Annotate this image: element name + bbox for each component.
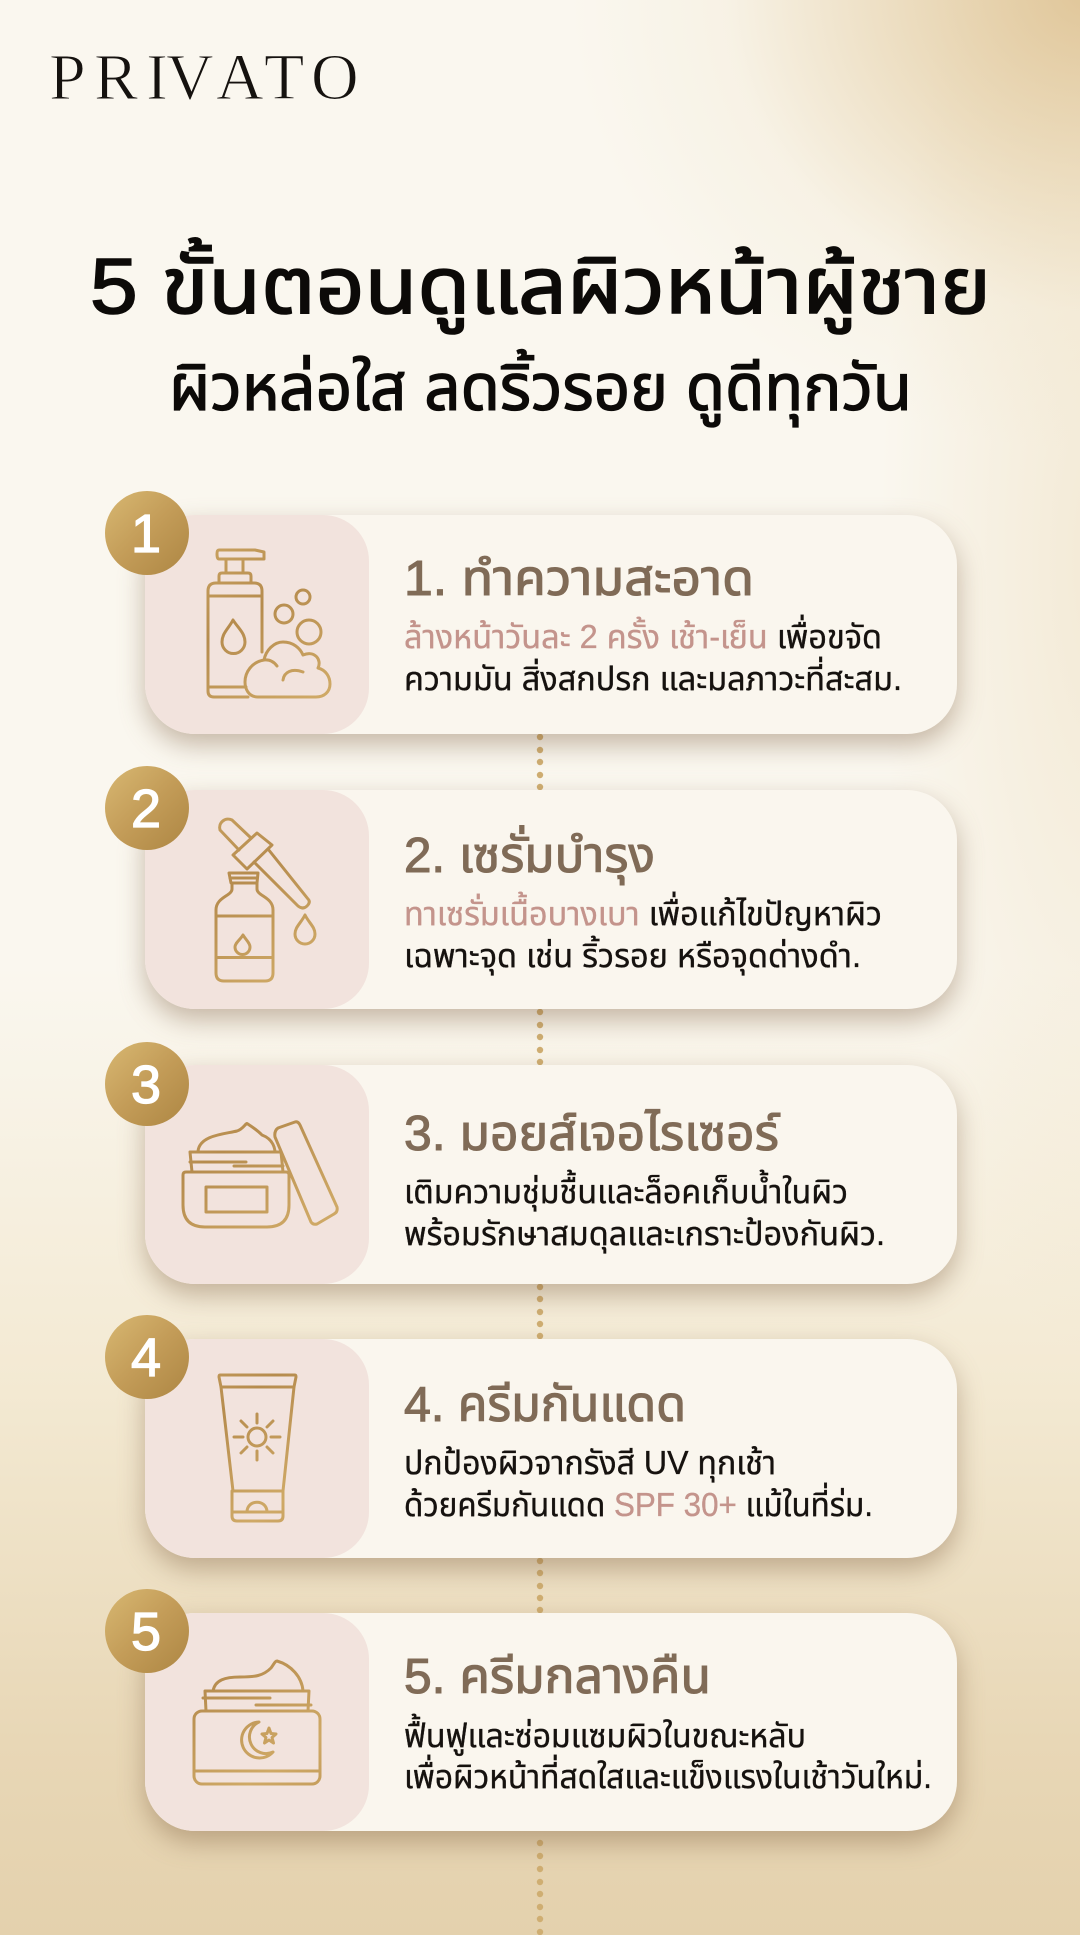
icon: serum dropper bottle [216, 819, 315, 981]
step description [404, 1169, 885, 1254]
step description: ด้วยครีมกันแดด SPF 30+ แม้ในที่ร่ม. [404, 1482, 873, 1523]
panel: step 3 [105, 1042, 957, 1284]
step description [404, 1713, 932, 1795]
icon panel [145, 1065, 369, 1284]
card background [145, 1613, 957, 1831]
number badge [105, 1042, 189, 1126]
number badge [105, 1315, 189, 1399]
panel: step 2 [105, 766, 957, 1009]
step description [404, 1444, 873, 1523]
number badge [105, 766, 189, 850]
step description: เพื่อผิวหน้าที่สดใสและแข็งแรงในเช้าวันใหม่. [404, 1754, 932, 1795]
step title: 1. ทำความสะอาด [404, 552, 754, 606]
heading line 2: ผิวหล่อใส ลดริ้วรอย ดูดีทุกวัน [169, 349, 912, 427]
number badge: 2 [131, 779, 161, 839]
number badge: 5 [131, 1602, 161, 1662]
step description: เฉพาะจุด เช่น ริ้วรอย หรือจุดด่างดำ. [404, 935, 861, 976]
icon panel [145, 1339, 369, 1558]
step title: 4. ครีมกันแดด [404, 1378, 686, 1432]
logo: PRIVATO [49, 41, 359, 114]
heading line 1: 5 ขั้นตอนดูแลผิวหน้าผู้ชาย [90, 238, 991, 334]
icon panel [145, 515, 369, 734]
panel: step 4 [105, 1315, 957, 1558]
icon: pump bottle and foam [208, 550, 330, 697]
panel: step 5 [105, 1589, 957, 1831]
step title: 3. มอยส์เจอไรเซอร์ [404, 1107, 780, 1161]
step description: ปกป้องผิวจากรังสี UV ทุกเช้า [404, 1444, 776, 1483]
step description [404, 891, 882, 976]
step description: ทาเซรั่มเนื้อบางเบา เพื่อแก้ไขปัญหาผิว [404, 891, 882, 932]
icon panel [145, 1613, 369, 1831]
step description: ล้างหน้าวันละ 2 ครั้ง เช้า-เย็น เพื่อขจัด [404, 614, 882, 655]
dotted connector 4 [537, 1558, 543, 1613]
card background [145, 790, 957, 1009]
number badge: 4 [131, 1328, 161, 1388]
title [90, 238, 991, 427]
dotted connector 3 [537, 1284, 543, 1339]
number badge [105, 491, 189, 575]
card background [145, 1065, 957, 1284]
step description: ความมัน สิ่งสกปรก และมลภาวะที่สะสม. [404, 656, 902, 697]
panel: step 1 [105, 491, 957, 734]
step description: พร้อมรักษาสมดุลและเกราะป้องกันผิว. [404, 1215, 885, 1254]
dotted connector 1 [537, 734, 543, 790]
step title: 5. ครีมกลางคืน [404, 1650, 711, 1704]
number badge: 1 [131, 504, 161, 564]
dotted connector 5 [537, 1840, 543, 1935]
number badge [105, 1589, 189, 1673]
icon panel [145, 790, 369, 1009]
step description [404, 614, 902, 697]
step description: เติมความชุ่มชื้นและล็อคเก็บน้ำในผิว [404, 1169, 848, 1212]
icon: moisturizer jar with lid [183, 1122, 337, 1227]
icon: night cream jar [194, 1661, 320, 1784]
step title: 2. เซรั่มบำรุง [404, 825, 655, 885]
step description: ฟื้นฟูและซ่อมแซมผิวในขณะหลับ [404, 1713, 806, 1756]
dotted connector 2 [537, 1009, 543, 1065]
card background [145, 515, 957, 734]
number badge: 3 [131, 1055, 161, 1115]
card background [145, 1339, 957, 1558]
icon: sunscreen tube [219, 1375, 296, 1521]
